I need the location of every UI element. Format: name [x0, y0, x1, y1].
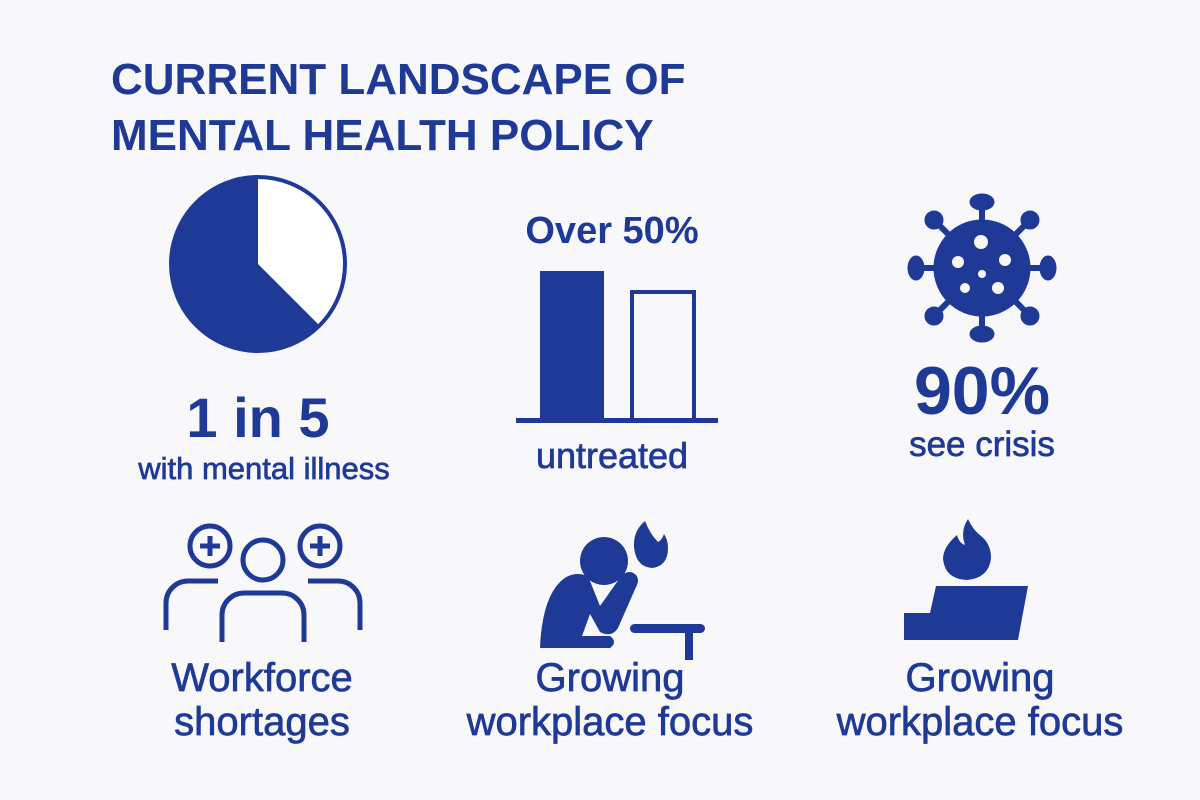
label: Growing workplace focus (1) [466, 656, 753, 744]
title [111, 55, 685, 160]
title: CURRENT LANDSCAPE OF [111, 55, 685, 104]
label: Growing workplace focus (2) [836, 656, 1123, 744]
label: untreated: untreated [536, 435, 688, 476]
label: Growing workplace focus (1): Growing [536, 656, 684, 700]
label: Growing workplace focus (2): Growing [906, 656, 1054, 700]
stat: Over 50%: Over 50% [525, 210, 699, 252]
label: Growing workplace focus (1): workplace focus [467, 700, 753, 744]
icon: laptop with flame [904, 519, 1028, 640]
label: see crisis: see crisis [909, 425, 1055, 464]
bar chart [516, 271, 718, 423]
icon: stressed person at desk [540, 521, 705, 660]
label: Growing workplace focus (2): workplace focus [837, 700, 1123, 744]
label: Workforce shortages [171, 656, 353, 744]
stat: 1 in 5: 1 in 5 [186, 386, 330, 449]
title: MENTAL HEALTH POLICY [111, 111, 654, 160]
stat: 90%: 90% [914, 353, 1050, 429]
icon: workforce people [164, 524, 362, 642]
icon: virus [908, 194, 1056, 342]
label: with mental illness: with mental illness [138, 451, 390, 486]
label: Workforce shortages: Workforce [171, 656, 353, 700]
icon: pie chart [169, 175, 347, 353]
label: Workforce shortages: shortages [174, 700, 350, 744]
